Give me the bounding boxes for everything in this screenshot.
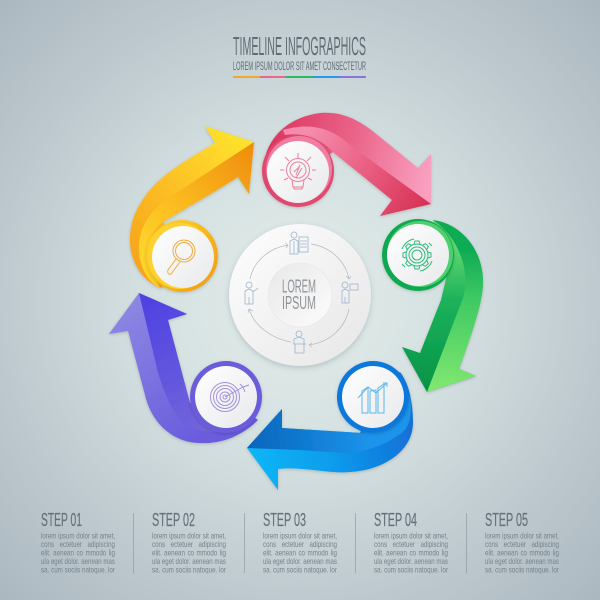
arrow: blue xyxy=(247,372,413,490)
icon: magnifier xyxy=(168,240,195,274)
text: TIMELINE INFOGRAPHICS xyxy=(233,31,366,61)
step 2 text xyxy=(152,510,226,574)
center label: LOREM xyxy=(282,276,316,296)
step 5 text: sa. cum sociis natoque. lor xyxy=(485,566,559,574)
icon: teacher pointing xyxy=(245,282,258,304)
icon: bar chart xyxy=(358,383,387,413)
cycle arrows xyxy=(248,243,351,347)
step 5 text: STEP 05 xyxy=(485,510,528,530)
step 5 text xyxy=(485,510,559,574)
step 3 text: cons ectetuer adipiscing xyxy=(263,540,337,549)
step 1 text: ula eget dolor. aenean mas xyxy=(41,557,115,566)
step 2 text: lorem ipsum dolor sit amet, xyxy=(152,532,226,540)
step 4 text: ula eget dolor. aenean mas xyxy=(374,557,448,566)
icon: presenter with screen xyxy=(342,282,358,303)
step 1 text: elit. aenean co mmodo lig xyxy=(41,548,115,558)
arrow: green xyxy=(402,220,483,392)
step 3 text xyxy=(263,510,337,574)
step 5 text: cons ectetuer adipiscing xyxy=(485,540,559,549)
step 3 text: sa. cum sociis natoque. lor xyxy=(263,566,337,574)
step 3 node: gear xyxy=(382,219,454,291)
icon: speaker at podium xyxy=(293,331,306,353)
step 1 text: STEP 01 xyxy=(41,510,82,530)
step 5 text: ula eget dolor. aenean mas xyxy=(485,557,559,566)
step 2 text: ula eget dolor. aenean mas xyxy=(152,557,226,566)
center label xyxy=(282,276,316,313)
step 4 text: lorem ipsum dolor sit amet, xyxy=(374,532,448,540)
step 1 text: lorem ipsum dolor sit amet, xyxy=(41,532,115,540)
step 3 text: elit. aenean co mmodo lig xyxy=(263,548,337,558)
icon: gear xyxy=(402,239,432,271)
arrow: yellow xyxy=(130,126,254,288)
step 1 text: cons ectetuer adipiscing xyxy=(41,540,115,549)
step 5 text: lorem ipsum dolor sit amet, xyxy=(485,532,559,540)
step 1 text xyxy=(41,510,115,574)
step 3 text: ula eget dolor. aenean mas xyxy=(263,557,337,566)
step 3 text: lorem ipsum dolor sit amet, xyxy=(263,532,337,540)
center label: IPSUM xyxy=(282,293,316,313)
arrow: pink xyxy=(263,113,431,216)
step 3 text: STEP 03 xyxy=(263,510,306,530)
step 4 node: chart xyxy=(337,361,409,433)
step 1 node: magnifier xyxy=(146,220,218,292)
step 4 text: elit. aenean co mmodo lig xyxy=(374,548,448,558)
step 4 text: sa. cum sociis natoque. lor xyxy=(374,566,448,574)
step 2 text: elit. aenean co mmodo lig xyxy=(152,548,226,558)
step 2 text: STEP 02 xyxy=(152,510,195,530)
icon: light bulb xyxy=(280,153,316,189)
icon: presenter with board xyxy=(290,232,308,254)
step 4 text xyxy=(374,510,448,574)
step 1 text: sa. cum sociis natoque. lor xyxy=(41,566,115,574)
arrow: purple xyxy=(109,293,258,443)
step 2 text: sa. cum sociis natoque. lor xyxy=(152,566,226,574)
text: LOREM IPSUM DOLOR SIT AMET CONSECTETUR xyxy=(233,61,366,73)
step 2 text: cons ectetuer adipiscing xyxy=(152,540,226,549)
step 2 node: light bulb xyxy=(262,135,334,207)
step 4 text: STEP 04 xyxy=(374,510,417,530)
center disc xyxy=(229,224,371,366)
step 5 text: elit. aenean co mmodo lig xyxy=(485,548,559,558)
step 4 text: cons ectetuer adipiscing xyxy=(374,540,448,549)
step 5 node: target xyxy=(190,361,262,433)
colour bar xyxy=(233,76,366,78)
icon: target xyxy=(210,382,249,412)
